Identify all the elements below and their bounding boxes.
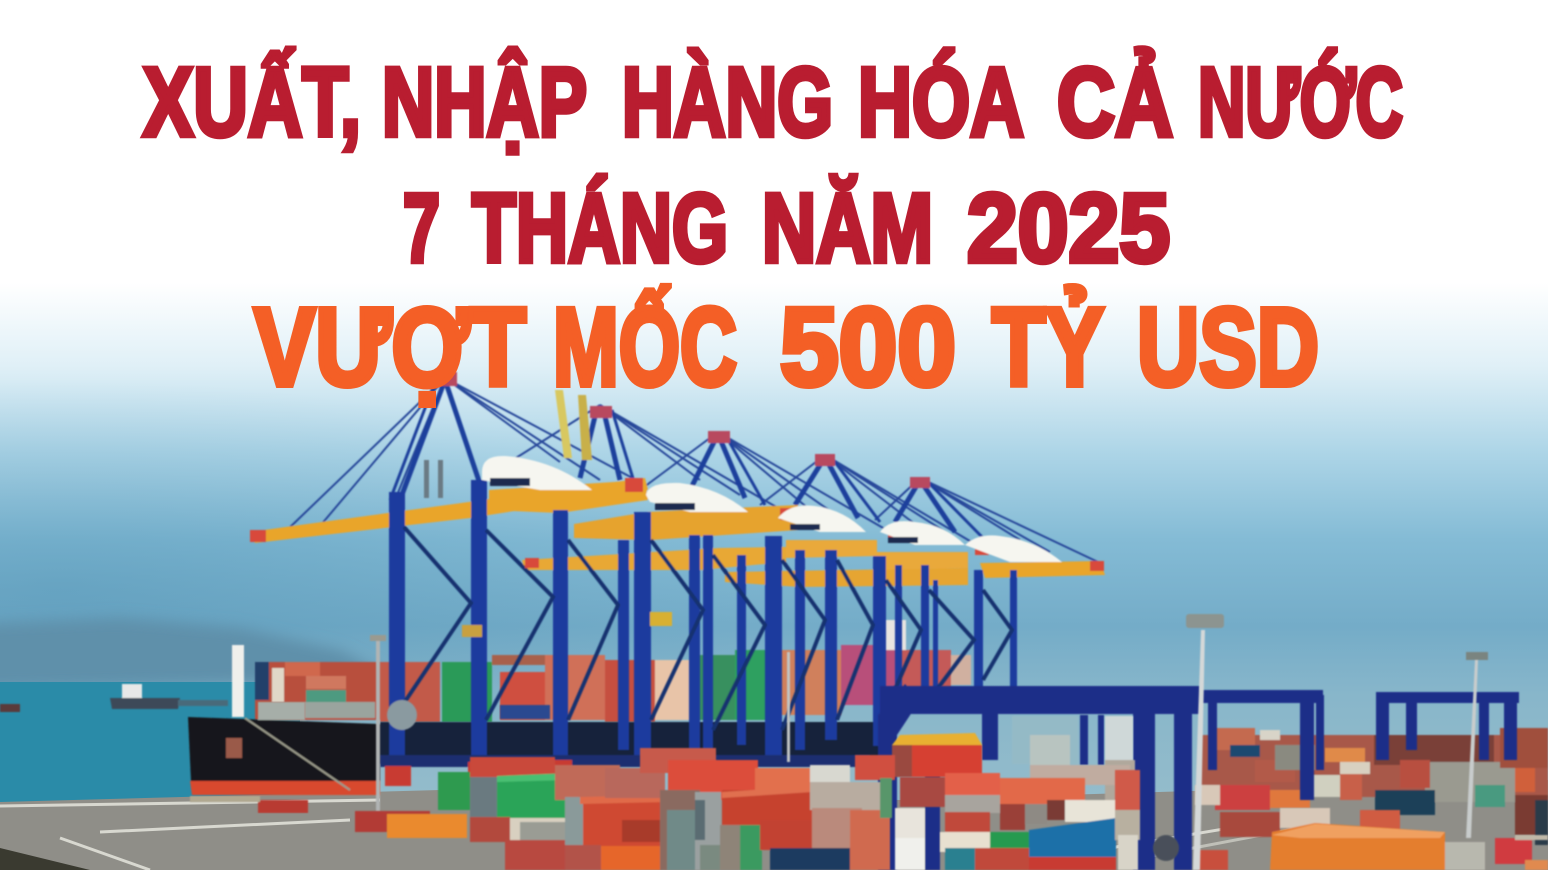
crane rear cables and A-frames: [285, 378, 1098, 562]
title line 2: NĂM: [762, 174, 933, 282]
title line 1: HÀNG: [622, 48, 833, 156]
lighting mast left: [370, 635, 790, 812]
middle containers: [900, 777, 945, 807]
foreground containers: [355, 748, 1548, 870]
back container yard right: [1195, 728, 1548, 845]
white machinery houses: [482, 456, 1062, 562]
quay cranes: [250, 372, 1105, 786]
boom tips: [250, 478, 1104, 571]
title line 1: XUẤT,: [143, 48, 361, 156]
title line 2: THÁNG: [472, 174, 728, 282]
title line 3: highlight: MỐC: [553, 286, 737, 409]
title line 1: NHẬP: [382, 48, 587, 156]
crane apex heads: [433, 372, 930, 488]
darker sky haze on the left: [0, 370, 770, 800]
crane blue legs: [389, 480, 1017, 777]
dark corner of road: [0, 848, 90, 870]
yellow mast behind: [555, 390, 592, 460]
gantry spreader with red container: [892, 733, 982, 777]
title line 2: 7: [403, 174, 440, 282]
crane bracing: [404, 527, 1012, 730]
yard gantry cranes: [878, 684, 1519, 870]
title line 3: highlight: USD: [1137, 286, 1319, 409]
title line 1: CẢ: [1057, 48, 1173, 156]
title line 2: [403, 174, 1170, 282]
title line 3: highlight: VƯỢT: [254, 286, 526, 409]
quay ground: [0, 780, 1548, 870]
title line 2: 2025: [967, 174, 1170, 282]
crane bases: [380, 755, 870, 767]
title line 1: HÓA: [858, 48, 1024, 156]
tall lighting masts: [1186, 614, 1488, 870]
distant hills: [0, 618, 400, 690]
orange containers: [1220, 812, 1280, 837]
container vessel hull: [188, 645, 880, 795]
distant ship on the sea: [0, 684, 228, 712]
title line 1: NƯỚC: [1198, 48, 1403, 156]
road markings: [0, 800, 1320, 870]
quay vehicle: [190, 796, 308, 813]
view through gantry: [1012, 716, 1135, 810]
title line 3: highlight: [254, 286, 1319, 409]
grey towers beside crane: [424, 460, 443, 498]
distant container cargo on vessel: [255, 620, 971, 722]
title line 1: [143, 48, 1403, 156]
sea: [0, 682, 300, 804]
title line 3: highlight: TỶ: [992, 286, 1104, 409]
crane booms: [250, 478, 648, 543]
title line 3: highlight: 500: [780, 286, 956, 409]
